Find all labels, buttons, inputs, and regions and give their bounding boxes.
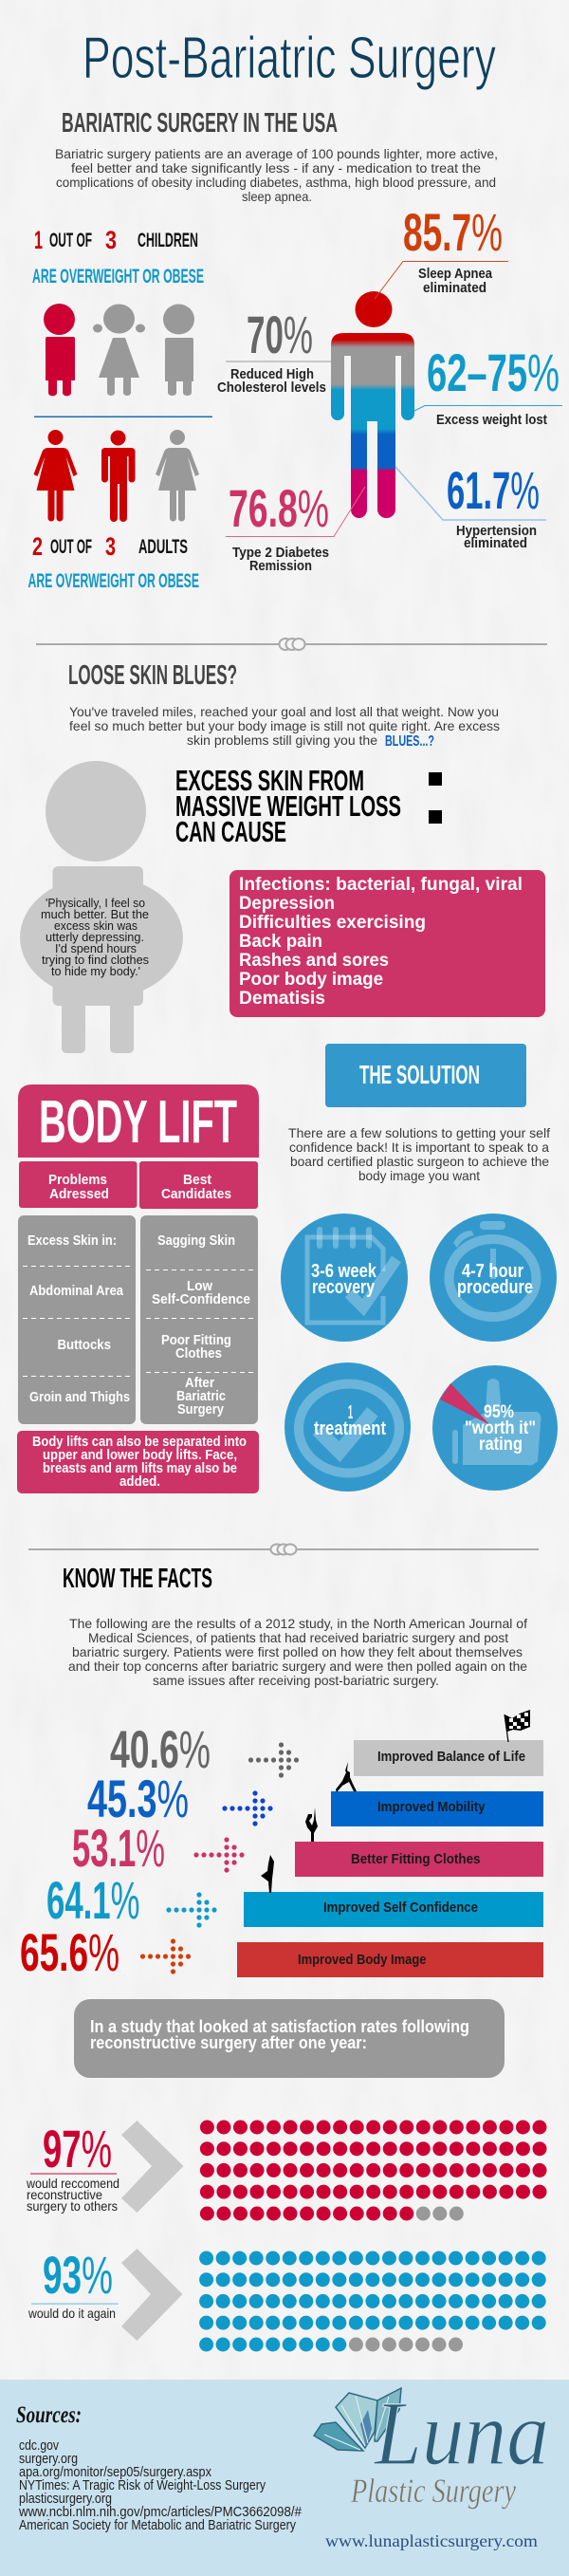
intro text: feel so much better but your body image is still not quite right. Are excess bbox=[69, 718, 500, 733]
icon: person with colored bands bbox=[331, 291, 414, 518]
step: better fitting clothes bbox=[72, 1818, 543, 1878]
stat: hypertension: Hypertension bbox=[456, 523, 537, 539]
stat: hypertension: 61.7% bbox=[447, 460, 540, 520]
step: balance of life bbox=[110, 1719, 543, 1779]
step: body image: 65.6% bbox=[20, 1922, 119, 1982]
step: mobility: 45.3% bbox=[87, 1769, 189, 1828]
sources list: NYTimes: A Tragic Risk of Weight-Loss Surgery bbox=[19, 2478, 266, 2493]
stat: 97 percent would recommend: 97% bbox=[43, 2119, 112, 2178]
panel: body lift bbox=[17, 1084, 259, 1493]
intro text: BLUES...? bbox=[385, 733, 434, 750]
panel: complications list: Rashes and sores bbox=[239, 951, 389, 971]
intro text: You've traveled miles, reached your goal and lost all that weight. Now you bbox=[69, 704, 499, 719]
icon: woman, grey bbox=[156, 430, 199, 522]
body lift title: BODY LIFT bbox=[39, 1087, 237, 1156]
step: body image bbox=[20, 1922, 543, 1982]
body outcomes figure bbox=[217, 202, 562, 574]
solution banner: THE SOLUTION bbox=[359, 1060, 480, 1089]
1 out of 3 children: CHILDREN bbox=[138, 230, 198, 251]
stat: cholesterol: Reduced High bbox=[230, 366, 314, 382]
panel: complications list: Difficulties exercising bbox=[239, 913, 426, 933]
step: body image: Improved Body Image bbox=[298, 1952, 427, 1968]
column header: best candidates: Candidates bbox=[161, 1186, 231, 1202]
children statistic bbox=[32, 226, 204, 396]
stat: diabetes: Remission bbox=[249, 558, 312, 574]
heading: KNOW THE FACTS bbox=[63, 1564, 212, 1594]
2 out of 3 adults: OUT OF bbox=[50, 536, 92, 558]
stat: diabetes: Type 2 Diabetes bbox=[232, 545, 329, 561]
icon circle: worth it rating: 95% bbox=[484, 1402, 514, 1422]
icon: butterfly bbox=[314, 2388, 401, 2451]
column header: problems addressed bbox=[19, 1161, 137, 1208]
list: best candidates: Sagging Skin bbox=[157, 1232, 235, 1249]
icon circle: procedure: procedure bbox=[457, 1277, 533, 1298]
body lift note bbox=[17, 1431, 259, 1493]
study text bbox=[68, 1616, 527, 1688]
panel: complications list bbox=[229, 870, 545, 1017]
intro text: complications of obesity including diabetes, asthma, high blood pressure, and bbox=[56, 175, 496, 190]
study text: same issues after receiving post-bariatric surgery. bbox=[153, 1673, 439, 1688]
icon: yoga figure lunge bbox=[336, 1762, 357, 1792]
panel: complications list: Poor body image bbox=[239, 970, 383, 990]
section: bariatric surgery in the USA bbox=[55, 108, 498, 204]
icon circle: worth it rating: "worth it" bbox=[465, 1418, 536, 1438]
stat: diabetes bbox=[226, 478, 365, 574]
icon: grey figure with quote bbox=[20, 761, 183, 1053]
column header: best candidates bbox=[139, 1161, 258, 1209]
quote: 'Physically, I feel so bbox=[46, 896, 145, 910]
icon: checkered flag bbox=[505, 1710, 530, 1742]
stat: 97 percent would recommend: surgery to others bbox=[27, 2198, 118, 2214]
solution text: confidence back! It is important to speak to a bbox=[289, 1140, 549, 1155]
body lift title bbox=[18, 1084, 259, 1158]
excess skin heading: MASSIVE WEIGHT LOSS bbox=[175, 789, 401, 823]
dot chart: 93 of 100 bbox=[199, 2251, 546, 2351]
excess skin heading: CAN CAUSE bbox=[175, 815, 286, 848]
intro text: feel better and take significantly less - if any - medication to treat the bbox=[71, 160, 481, 176]
2 out of 3 adults: ADULTS bbox=[138, 536, 188, 558]
list: best candidates: Self-Confidence bbox=[152, 1291, 250, 1307]
list: best candidates: Surgery bbox=[177, 1401, 225, 1418]
body lift note: added. bbox=[119, 1473, 160, 1490]
1 out of 3 children bbox=[34, 226, 198, 254]
stat: hypertension bbox=[395, 460, 546, 551]
heading: BARIATRIC SURGERY IN THE USA bbox=[62, 108, 338, 139]
intro text: Bariatric surgery patients are an average of 100 pounds lighter, more active, bbox=[55, 146, 498, 161]
colon squares bbox=[429, 772, 442, 824]
stat: excess weight bbox=[414, 343, 562, 428]
column header: problems addressed: Problems bbox=[48, 1172, 107, 1188]
2 out of 3 adults bbox=[32, 532, 188, 561]
sources list: cdc.gov bbox=[19, 2438, 60, 2454]
icon: yoga figure standing bow bbox=[305, 1807, 318, 1842]
list: best candidates bbox=[140, 1215, 258, 1424]
icon circle: recovery: recovery bbox=[312, 1277, 376, 1298]
quote: trying to find clothes bbox=[42, 953, 149, 967]
stat: 93 percent would do it again: 93% bbox=[43, 2245, 113, 2305]
solution text: There are a few solutions to getting your self bbox=[288, 1125, 550, 1140]
callout: satisfaction study: In a study that looked at satisfaction rates following bbox=[90, 2017, 469, 2036]
section: know the facts bbox=[20, 1564, 543, 1982]
intro text bbox=[55, 146, 498, 204]
panel: the solution bbox=[281, 1044, 558, 1492]
sources heading: Sources: bbox=[16, 2402, 82, 2428]
callout: satisfaction study: reconstructive surgery after one year: bbox=[90, 2033, 367, 2052]
icon circle: treatment: 1 bbox=[348, 1402, 353, 1423]
quote bbox=[41, 896, 149, 978]
logo wordmark: Luna bbox=[373, 2382, 549, 2484]
solution text: body image you want bbox=[358, 1168, 480, 1183]
website: www.lunaplasticsurgery.com bbox=[325, 2531, 538, 2550]
step: better fitting clothes: 53.1% bbox=[72, 1818, 165, 1878]
step: self confidence: 64.1% bbox=[46, 1870, 140, 1930]
stat: hypertension: eliminated bbox=[464, 535, 527, 551]
stat: sleep apnea bbox=[375, 202, 508, 299]
stat: cholesterol: Cholesterol levels bbox=[217, 380, 326, 396]
sources list: www.ncbi.nlm.nih.gov/pmc/articles/PMC3662098/# bbox=[18, 2505, 302, 2520]
list: problems addressed: Abdominal Area bbox=[29, 1283, 124, 1299]
column header: best candidates: Best bbox=[183, 1172, 211, 1188]
step: mobility: Improved Mobility bbox=[377, 1799, 486, 1815]
solution banner bbox=[325, 1044, 526, 1107]
body lift note: breasts and arm lifts may also be bbox=[43, 1460, 237, 1476]
list: problems addressed: Buttocks bbox=[57, 1337, 111, 1353]
panel: complications list: Dematisis bbox=[239, 989, 325, 1009]
sources list: apa.org/monitor/sep05/surgery.aspx bbox=[19, 2465, 212, 2480]
column header: problems addressed: Adressed bbox=[49, 1186, 109, 1202]
panel: complications list: Depression bbox=[239, 894, 335, 914]
icon circle: procedure: 4-7 hour bbox=[462, 1261, 523, 1282]
list: best candidates: After bbox=[185, 1375, 214, 1391]
solution text: board certified plastic surgeon to achieve the bbox=[290, 1154, 549, 1169]
adults statistic bbox=[28, 430, 199, 592]
icon circle: recovery: 3-6 week bbox=[311, 1261, 377, 1282]
stat: cholesterol: 70% bbox=[247, 305, 313, 364]
sources list: surgery.org bbox=[19, 2452, 78, 2467]
stat: 93 percent would do it again bbox=[28, 2245, 546, 2351]
quote: much better. But the bbox=[41, 907, 149, 921]
improvement steps chart bbox=[20, 1710, 543, 1982]
1 out of 3 children: 1 bbox=[34, 226, 43, 254]
sources list: plasticsurgery.org bbox=[19, 2492, 112, 2507]
chevron bbox=[121, 2121, 184, 2213]
icon circle: procedure bbox=[430, 1214, 557, 1342]
are overweight or obese: ARE OVERWEIGHT OR OBESE bbox=[28, 570, 199, 592]
icon: boy, red bbox=[44, 304, 75, 396]
icon: yoga figure tree pose bbox=[261, 1855, 274, 1893]
study text: The following are the results of a 2012 study, in the North American Journal of bbox=[69, 1616, 527, 1631]
icon: woman, red bbox=[34, 430, 78, 522]
logo: Luna Plastic Surgery bbox=[314, 2382, 549, 2550]
heading: LOOSE SKIN BLUES? bbox=[68, 660, 237, 691]
excess skin heading: EXCESS SKIN FROM bbox=[175, 764, 364, 797]
callout: satisfaction study bbox=[74, 1999, 505, 2078]
quote: I'd spend hours bbox=[55, 941, 137, 955]
solution text bbox=[288, 1125, 550, 1183]
section: loose skin blues bbox=[20, 660, 545, 1053]
2 out of 3 adults: 2 bbox=[32, 532, 43, 561]
study text: Medical Sciences, of patients that had received bariatric surgery and post bbox=[88, 1630, 508, 1645]
study text: bariatric surgery. Patients were first polled on how they felt about themselves bbox=[72, 1644, 523, 1659]
icon circle: worth it rating bbox=[432, 1365, 558, 1491]
study text: and their top concerns after bariatric surgery and were then polled again on the bbox=[68, 1659, 527, 1674]
pie wedge bbox=[440, 1383, 490, 1425]
stat: excess weight: Excess weight lost bbox=[436, 412, 547, 428]
body lift note: Body lifts can also be separated into bbox=[32, 1434, 247, 1450]
intro text: sleep apnea. bbox=[242, 189, 312, 204]
icon: girl, grey bbox=[93, 304, 145, 396]
panel: complications list: Infections: bacterial, fungal, viral bbox=[239, 875, 523, 895]
list: best candidates: Poor Fitting bbox=[161, 1332, 231, 1348]
icon circle: recovery bbox=[281, 1214, 408, 1342]
1 out of 3 children: OUT OF bbox=[49, 230, 92, 251]
stat: cholesterol bbox=[217, 305, 331, 396]
stat: diabetes: 76.8% bbox=[229, 478, 329, 538]
quote: excess skin was bbox=[54, 918, 138, 933]
body lift note: upper and lower body lifts. Face, bbox=[43, 1447, 237, 1463]
are overweight or obese: ARE OVERWEIGHT OR OBESE bbox=[32, 266, 204, 287]
stat: sleep apnea: Sleep Apnea bbox=[418, 266, 493, 282]
stat: sleep apnea: eliminated bbox=[423, 280, 486, 296]
step: self confidence bbox=[46, 1870, 543, 1930]
footer panel bbox=[0, 2380, 569, 2576]
stat: 93 percent would do it again: would do it again bbox=[28, 2306, 116, 2321]
dot chart: 97 of 100 bbox=[200, 2120, 546, 2220]
step: self confidence: Improved Self Confidence bbox=[323, 1900, 478, 1916]
quote: to hide my body.' bbox=[51, 964, 140, 978]
divider bbox=[36, 639, 547, 650]
2 out of 3 adults: 3 bbox=[105, 532, 116, 561]
excess skin heading bbox=[175, 764, 401, 848]
list: best candidates: Bariatric bbox=[176, 1388, 226, 1404]
icon circle: worth it rating: rating bbox=[479, 1435, 523, 1455]
step: balance of life: 40.6% bbox=[110, 1719, 211, 1779]
stat: sleep apnea: 85.7% bbox=[403, 202, 503, 262]
step: balance of life: Improved Balance of Life bbox=[377, 1749, 525, 1765]
panel: complications list: Back pain bbox=[239, 932, 322, 952]
list: best candidates: Clothes bbox=[175, 1345, 222, 1362]
quote: utterly depressing. bbox=[46, 930, 144, 944]
step: better fitting clothes: Better Fitting Clothes bbox=[351, 1851, 480, 1867]
list: best candidates: Low bbox=[187, 1278, 212, 1294]
list: problems addressed: Excess Skin in: bbox=[28, 1232, 117, 1249]
list: problems addressed bbox=[18, 1215, 136, 1424]
sources list: American Society for Metabolic and Bariatric Surgery bbox=[19, 2518, 297, 2533]
chevron bbox=[121, 2249, 182, 2341]
list: problems addressed: Groin and Thighs bbox=[29, 1389, 130, 1405]
icon circle: treatment: treatment bbox=[314, 1418, 386, 1439]
stat: 97 percent would recommend: would reccomend bbox=[26, 2176, 119, 2191]
separator line bbox=[34, 416, 212, 417]
logo subtitle: Plastic Surgery bbox=[350, 2472, 516, 2510]
divider bbox=[28, 1545, 539, 1554]
sources list bbox=[18, 2438, 302, 2533]
stat: 97 percent would recommend bbox=[26, 2119, 546, 2220]
stat: 97 percent would recommend: reconstructive bbox=[27, 2187, 102, 2202]
1 out of 3 children: 3 bbox=[105, 226, 117, 254]
intro text: skin problems still giving you the bbox=[187, 732, 377, 748]
step: mobility bbox=[87, 1769, 543, 1828]
icon: man, red bbox=[101, 431, 135, 522]
icon: boy, grey bbox=[163, 304, 194, 396]
icon circle: treatment bbox=[284, 1362, 411, 1492]
intro text bbox=[69, 704, 500, 750]
